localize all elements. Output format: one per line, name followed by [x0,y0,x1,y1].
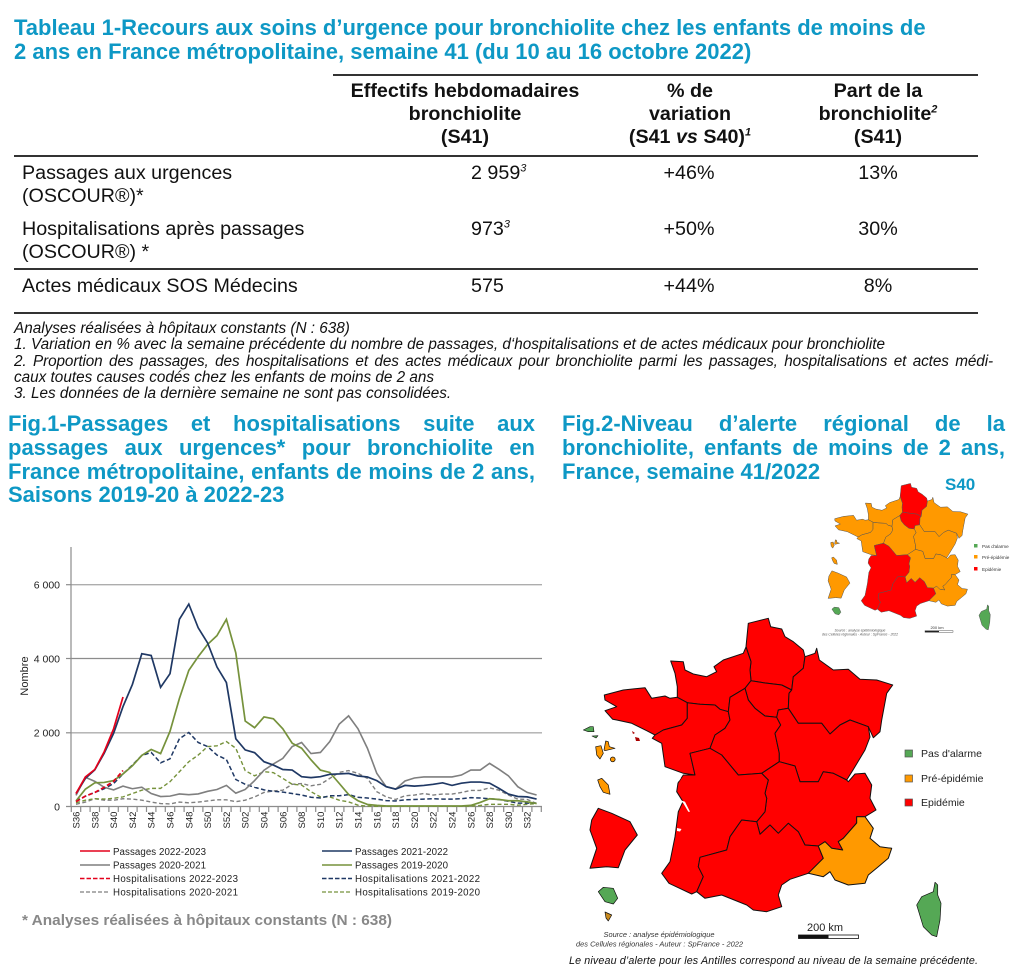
data series [76,604,537,806]
series: passages 2019-2020 [76,619,537,806]
map note: Le niveau d’alerte pour les Antilles correspond au niveau de la semaine précédente. [569,955,978,967]
heading: figure 2: bronchiolite, enfants de moins de 2 ans, [562,435,1005,460]
column header: variation: (S41 vs S40)1 [629,126,751,148]
x axis labels: S52 [222,812,233,828]
column header: effectifs [351,80,579,148]
chart legend [80,847,481,898]
region: PACA [808,817,892,885]
row: actes variation: +44% [664,275,714,297]
row: actes: Actes médicaux SOS Médecins [22,275,298,297]
region: Saint-Martin [583,727,598,738]
heading: figure 2: France, semaine 41/2022 [562,459,820,484]
region: Grand Est [788,648,893,738]
x axis labels: S08 [297,812,308,828]
x axis labels: S06 [278,812,289,828]
map legend: Pas d'alarme [921,748,982,760]
inset scale [925,625,953,632]
table footnotes: 2. Proportion des passages, des hospitalisations et des actes médicaux pour bronchiolite parmi les passages, hospitalisations et actes médi- [14,353,993,370]
series: hospitalisations 2021-2022 [76,732,537,803]
heading: figure 1: Saisons 2019-20 à 2022-23 [8,482,284,507]
column header: part [819,80,938,148]
column header: effectifs: bronchiolite [409,103,521,125]
x axis labels: S46 [166,812,176,828]
region: Auvergne-Rhone-Alpes [757,762,876,850]
map legend [905,748,984,809]
row: actes part: 8% [864,275,892,297]
row: hospitalisations part: 30% [858,218,898,240]
label: S40: S40 [945,475,975,494]
region: Reunion [598,887,618,904]
row: passages effectif: 2 9593 [471,162,526,184]
row: hospitalisations: Hospitalisations après passages [22,218,304,240]
x axis labels: S38 [90,812,101,828]
series: passages 2020-2021 [76,716,537,797]
series: hospitalisations 2022-2023 [76,770,123,802]
x axis labels: S02 [241,812,252,828]
x axis labels: S26 [466,812,477,828]
table footnotes: caux toutes causes codés chez les enfants de moins de 2 ans [14,369,434,386]
chart legend: Passages 2022-2023 [113,847,206,858]
map source: Source : analyse épidémiologique [604,930,714,939]
row: hospitalisations effectif: 9733 [471,218,510,240]
y axis labels: 2 000 [34,728,60,740]
column header: variation: % de [667,80,713,102]
table footnotes: 3. Les données de la dernière semaine ne sont pas consolidées. [14,385,451,402]
column header: part: (S41) [854,126,902,148]
chart footnote: * Analyses réalisées à hôpitaux constants (N : 638) [22,912,392,929]
series: passages 2021-2022 [76,604,537,799]
x axis labels: S44 [147,812,158,828]
coast details: estuaries and islands [672,776,690,832]
x axis labels: S40 [109,812,120,828]
x axis labels: S50 [203,812,214,828]
table footnotes: Analyses réalisées à hôpitaux constants (N : 638) [14,320,350,337]
map source: des Cellules régionales - Auteur : SpFrance - 2022 [576,940,743,948]
inset legend: Epidémie [982,567,1002,572]
table footnotes: 1. Variation en % avec la semaine précédente du nombre de passages, d‘hospitalisations et de actes médicaux pour bronchiolite [14,336,885,353]
x axis labels: S48 [184,812,195,828]
chart legend: Passages 2021-2022 [355,847,448,858]
line chart: passages et hospitalisations [19,547,542,828]
y axis labels: 0 [54,802,60,814]
x axis labels: S24 [448,812,458,828]
row: passages: (OSCOUR®)* [22,185,144,207]
x axis labels: S14 [354,812,364,828]
x axis labels [72,812,534,828]
map scale bar [798,922,858,938]
column header: part: bronchiolite2 [819,103,937,125]
table footnotes [13,320,993,402]
map: France S40 inset [822,475,1010,636]
inset legend [974,544,1010,572]
heading: figure 2 [562,411,1006,484]
heading: figure 1 [8,411,535,507]
row: passages variation: +46% [664,162,714,184]
map legend: Pré-épidémie [921,773,984,785]
column header: part: Part de la [834,80,922,102]
region: Nouvelle-Aquitaine [662,748,768,894]
series: passages 2022-2023 [76,697,123,794]
region: Centre-Val de Loire [710,688,781,775]
inset legend: Pas d'alarme [982,544,1009,549]
row: passages part: 13% [858,162,898,184]
x axis labels: S30 [504,812,515,828]
x axis labels: S22 [429,812,440,828]
region: Normandie [671,647,751,712]
y axis labels: 6 000 [34,580,60,592]
region: Ile-de-France [745,681,792,717]
heading: figure 1: passages aux urgences* pour bronchiolite en [8,435,535,460]
region: Guadeloupe [596,741,615,762]
inset scale: 200 km [930,625,944,630]
x axis labels: S32 [523,812,534,828]
region: Mayotte [605,912,612,921]
map scale bar: 200 km [807,922,843,934]
series: hospitalisations 2020-2021 [76,771,537,804]
chart legend: Passages 2019-2020 [355,860,449,872]
region: Bourgogne-Franche-Comte [775,708,870,782]
heading: figure 2: Fig.2-Niveau d’alerte régional de la [562,411,1005,436]
column header: variation: variation [649,103,731,125]
x axis labels: S10 [316,812,327,828]
x axis labels: S36 [72,812,82,828]
chart legend: Hospitalisations 2019-2020 [355,888,481,898]
inset source: Source : analyse épidémiologique [835,628,886,632]
column header: effectifs: (S41) [441,126,489,148]
map source [576,930,743,948]
y axis title: Nombre [19,656,31,696]
column header: effectifs: Effectifs hebdomadaires [351,80,579,102]
region: Occitanie [697,820,823,912]
x axis labels: S04 [260,812,270,828]
inset source [822,628,898,636]
inset legend: Pré-épidémie [982,555,1010,560]
x axis labels: S18 [391,812,402,828]
region: Pays de la Loire [652,703,730,775]
region: Bretagne [604,688,687,735]
heading: figure 1: Fig.1-Passages et hospitalisations suite aux [8,411,535,436]
title: Tableau 1-Recours aux soins d’urgence pour bronchiolite chez les enfants de moins de [14,15,926,40]
row: passages: Passages aux urgences [22,162,232,184]
x axis labels: S42 [128,812,139,828]
series: hospitalisations 2019-2020 [76,742,537,806]
map legend: Epidémie [921,797,965,809]
x axis labels: S12 [335,812,346,828]
map: France S41 [576,618,984,948]
row: passages [22,162,232,207]
x axis labels: S16 [372,812,383,828]
y axis labels [34,580,60,814]
x axis labels: S28 [485,812,496,828]
chart legend: Hospitalisations 2022-2023 [113,874,238,885]
row: hospitalisations [22,218,304,263]
region: Hauts-de-France [746,618,805,690]
region: Corse [917,882,941,937]
heading: figure 1: France métropolitaine, enfants de moins de 2 ans, [8,459,535,484]
chart legend: Hospitalisations 2021-2022 [355,874,480,885]
title [14,15,926,64]
x axis labels: S20 [410,812,421,828]
title: 2 ans en France métropolitaine, semaine 41 (du 10 au 16 octobre 2022) [14,38,751,64]
table: recours aux soins [14,74,978,314]
chart legend: Hospitalisations 2020-2021 [113,888,238,898]
inset source: des Cellules régionales - Auteur : SpFrance - 2022 [822,632,898,636]
row: hospitalisations: (OSCOUR®) * [22,241,149,263]
column header: variation [629,80,751,148]
region: Guyane [590,808,637,868]
region: Martinique [598,778,610,794]
row: hospitalisations variation: +50% [664,218,714,240]
chart legend: Passages 2020-2021 [113,860,206,872]
y axis labels: 4 000 [34,654,60,666]
row: actes effectif: 575 [471,275,504,297]
